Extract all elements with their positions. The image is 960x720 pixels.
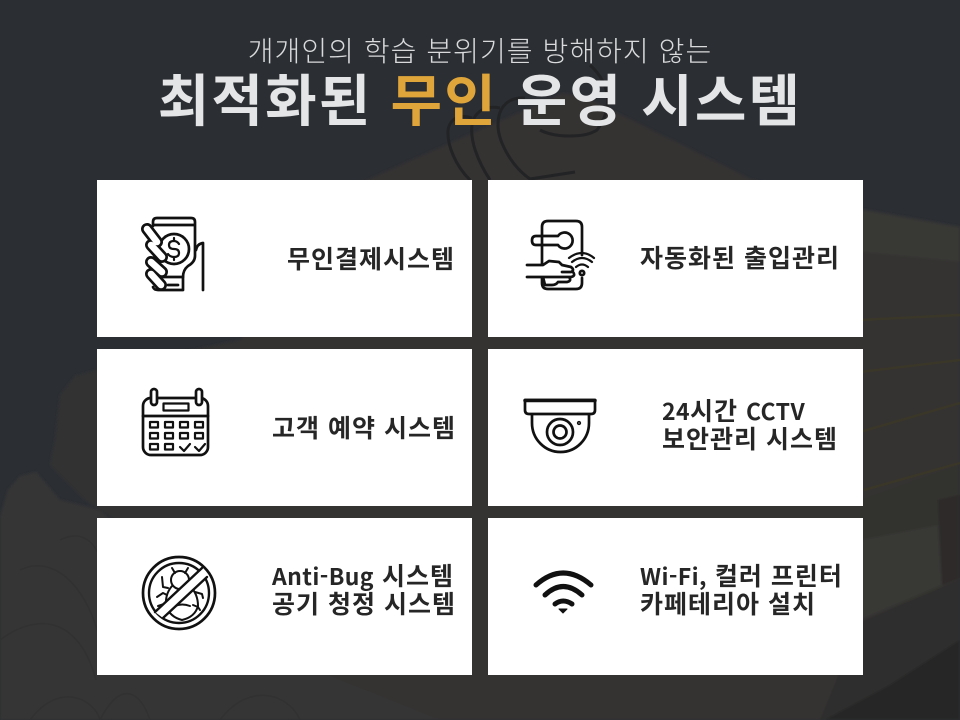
label: 보안관리 시스템 [662,420,838,456]
card: reservation [97,349,472,506]
card: CCTV [488,349,863,506]
title: 최적화된 무인 운영 시스템 [158,57,802,138]
icon: no-bug sign [142,556,216,630]
label: Anti-Bug 시스템 [272,557,454,593]
subtitle: 개개인의 학습 분위기를 방해하지 않는 [248,30,712,70]
label: 공기 청정 시스템 [272,585,456,621]
icon: dome camera [523,398,597,454]
icon: door lock with hand and wifi [526,220,596,290]
label: Wi-Fi, 컬러 프린터 [640,557,843,593]
label [272,557,456,621]
label [662,392,838,456]
card: payment [97,180,472,337]
label [640,557,843,621]
icon: wifi [534,570,594,614]
label: 24시간 CCTV [662,392,805,428]
card: wifi [488,518,863,675]
card: access control [488,180,863,337]
label: 카페테리아 설치 [640,585,816,621]
icon: hand holding phone with dollar coin [141,216,204,292]
label: 무인결제시스템 [287,240,455,276]
label: 자동화된 출입관리 [640,239,840,275]
label: 고객 예약 시스템 [272,409,456,445]
card: anti-bug [97,518,472,675]
icon: calendar [142,388,210,456]
